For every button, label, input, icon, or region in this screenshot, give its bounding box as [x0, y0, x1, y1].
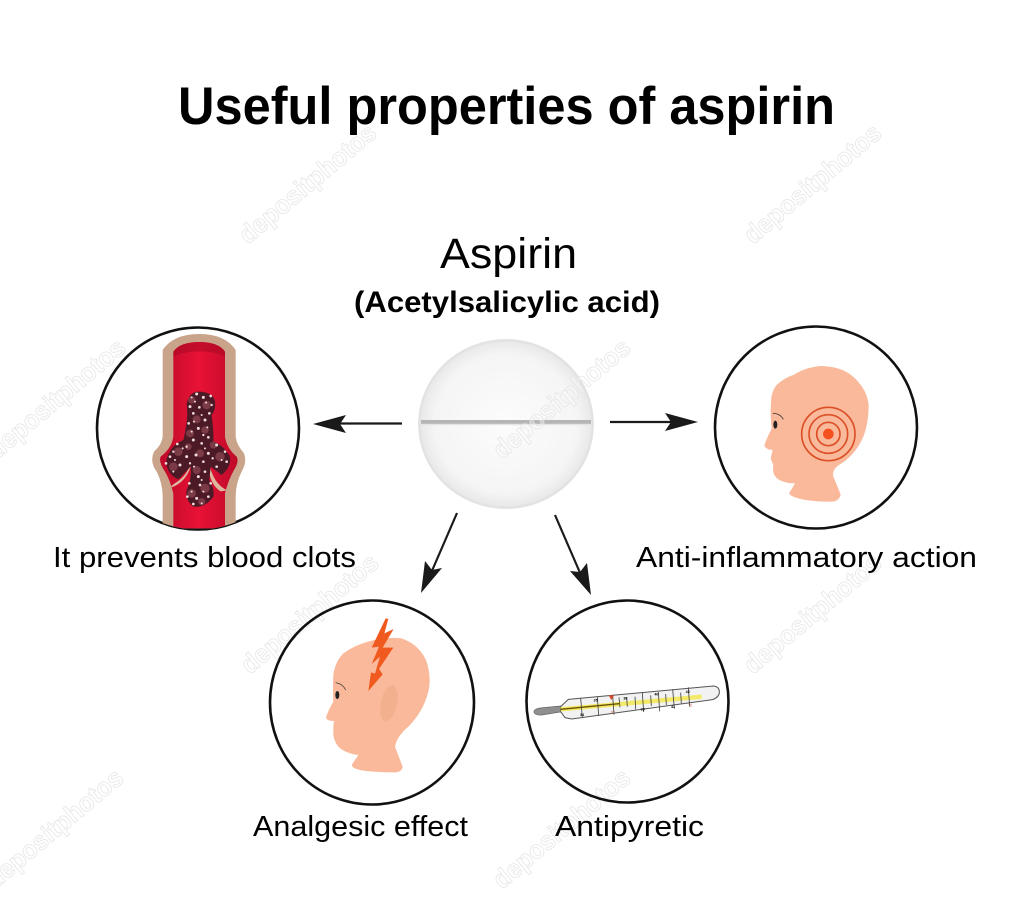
panel: antipyretic: [526, 600, 728, 802]
circle outline: antipyretic: [526, 600, 728, 802]
watermark pattern: [0, 117, 887, 895]
icon: thermometer: °C: [688, 703, 693, 707]
icon: thermometer: 40: [654, 692, 658, 696]
icon: aspirin tablet: [418, 332, 636, 509]
title: Useful properties of aspirin: [178, 77, 835, 136]
label: analgesic effect: Analgesic effect: [253, 811, 468, 843]
arrow: to antipyretic: [555, 515, 591, 595]
panel: analgesic: [270, 600, 474, 804]
clot mass: [166, 392, 230, 507]
arrow: to anti-inflammatory action: [610, 413, 698, 431]
icon: head with inflammation rings: [764, 366, 869, 502]
heading: Aspirin: Aspirin: [440, 230, 577, 278]
icon: thermometer: 37: [611, 710, 615, 714]
watermark pattern: depositphotos: [738, 117, 887, 250]
watermark pattern: depositphotos: [235, 547, 384, 680]
vessel wall: [152, 334, 245, 528]
subheading: Acetylsalicylic acid: (Acetylsalicylic acid): [354, 286, 660, 319]
icon: thermometer: [534, 686, 719, 719]
icon: aspirin tablet: depositphotos: [487, 332, 636, 465]
icon: thermometer: 39: [641, 708, 645, 712]
circle outline: blood clot: [97, 328, 299, 530]
icon: thermometer: 41: [671, 705, 675, 709]
panel: blood clot: [97, 328, 299, 530]
arrow: to blood clots: [313, 415, 402, 433]
circle outline: analgesic: [270, 600, 474, 804]
arrow: to analgesic effect: [421, 513, 457, 593]
icon: thermometer: 42: [686, 690, 690, 694]
icon: thermometer: 34: [580, 713, 585, 717]
valve flaps: [172, 467, 190, 487]
icon: head with lightning bolt: [326, 618, 430, 772]
circle outline: anti-inflammatory: [715, 326, 917, 528]
label: blood clots: It prevents blood clots: [53, 542, 356, 574]
label: anti-inflammatory action: Anti-inflammatory action: [636, 542, 977, 574]
label: antipyretic: Antipyretic: [555, 811, 704, 843]
icon: blood vessel with clot: [152, 334, 245, 528]
vessel lumen: [160, 342, 238, 528]
watermark pattern: depositphotos: [233, 117, 382, 250]
icon: thermometer: 35: [594, 699, 598, 703]
panel: anti-inflammatory: [715, 326, 917, 528]
watermark pattern: depositphotos: [738, 547, 887, 680]
watermark pattern: depositphotos: [487, 762, 636, 895]
icon: thermometer: 38: [623, 696, 627, 700]
